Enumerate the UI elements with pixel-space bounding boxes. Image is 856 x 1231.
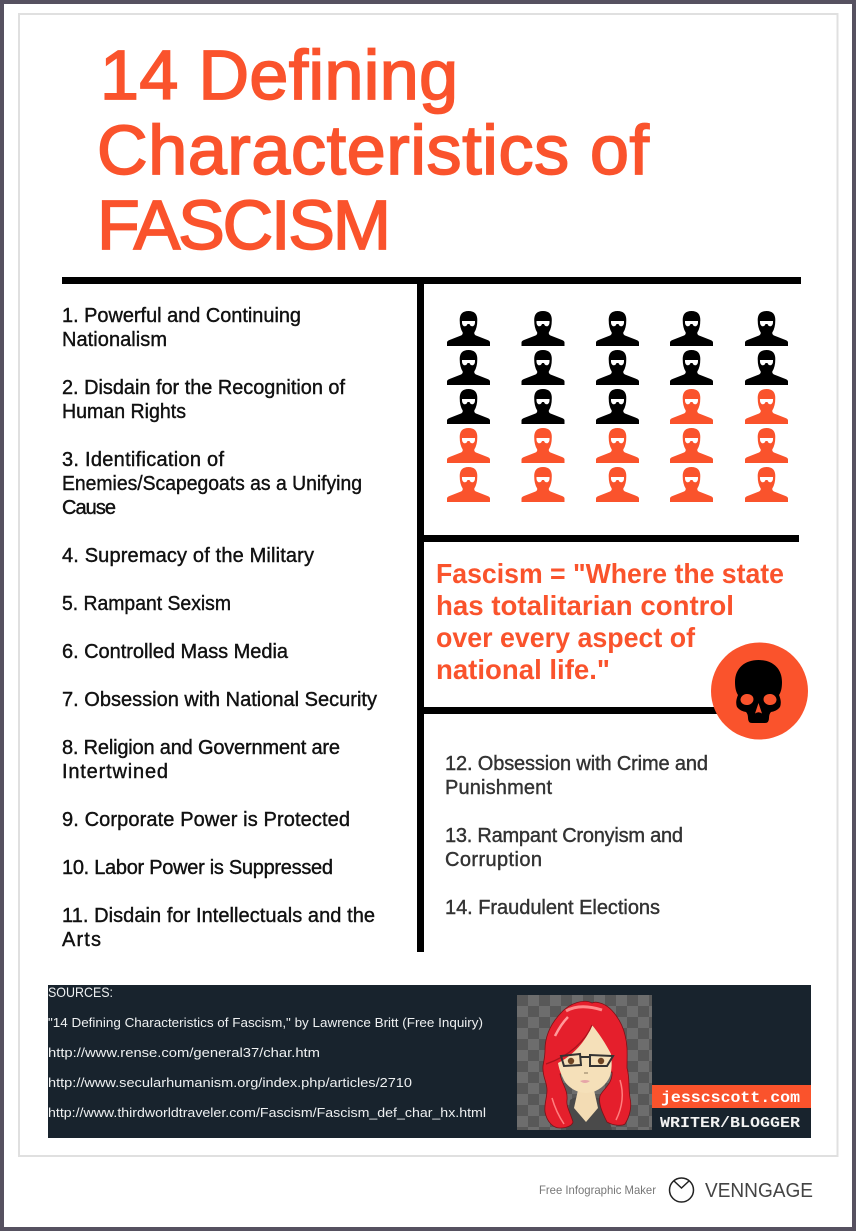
title: 14 Defining [100, 36, 458, 114]
fascism definition quote: national life." [436, 654, 610, 685]
fascism definition quote: has totalitarian control [436, 590, 734, 621]
list: characteristics 1 to 11: Human Rights [62, 401, 186, 423]
title: FASCISM [97, 186, 391, 264]
venngage footer logo [539, 1178, 813, 1202]
list: characteristics 12 to 14 [445, 753, 708, 919]
panel: sources and author [48, 984, 811, 1138]
fascism definition quote [436, 558, 784, 685]
icon: skull badge [711, 642, 808, 740]
list: characteristics 1 to 11: Arts [62, 929, 101, 951]
list: characteristics 1 to 11: 7. Obsession with National Security [62, 689, 377, 711]
list: characteristics 1 to 11: 9. Corporate Power is Protected [62, 809, 350, 831]
list: characteristics 1 to 11 [62, 305, 377, 951]
list: characteristics 1 to 11: 2. Disdain for the Recognition of [62, 377, 345, 399]
list: characteristics 12 to 14: Punishment [445, 777, 552, 799]
list: characteristics 1 to 11: 4. Supremacy of the Military [62, 545, 314, 567]
pictogram: 25 masked figures, 12 orange [447, 311, 788, 502]
list: characteristics 1 to 11: 1. Powerful and Continuing [62, 305, 301, 327]
sources text: "14 Defining Characteristics of Fascism," by Lawrence Britt (Free Inquiry) [48, 1015, 483, 1030]
list: characteristics 12 to 14: Corruption [445, 849, 542, 871]
list: characteristics 1 to 11: 6. Controlled Mass Media [62, 641, 289, 663]
sources text [48, 984, 486, 1120]
author site banner [652, 1085, 811, 1108]
sources text: http://www.secularhumanism.org/index.php/articles/2710 [48, 1075, 412, 1090]
list: characteristics 1 to 11: 5. Rampant Sexism [62, 593, 231, 615]
list: characteristics 1 to 11: 10. Labor Power is Suppressed [62, 857, 333, 879]
list: characteristics 12 to 14: 14. Fraudulent Elections [445, 897, 660, 919]
sources text: http://www.rense.com/general37/char.htm [48, 1045, 320, 1060]
author role: WRITER/BLOGGER [660, 1115, 800, 1132]
avatar: red-haired woman with glasses [517, 995, 652, 1130]
venngage footer logo: Free Infographic Maker [539, 1183, 656, 1197]
fascism definition quote: over every aspect of [436, 622, 696, 653]
list: characteristics 1 to 11: Intertwined [62, 761, 168, 783]
title [97, 36, 650, 264]
list: characteristics 1 to 11: 8. Religion and Government are [62, 737, 340, 759]
venngage footer logo: VENNGAGE [705, 1180, 813, 1202]
list: characteristics 12 to 14: 13. Rampant Cronyism and [445, 825, 683, 847]
fascism definition quote: Fascism = "Where the state [436, 558, 784, 589]
list: characteristics 1 to 11: 11. Disdain for Intellectuals and the [62, 905, 375, 927]
title: Characteristics of [97, 111, 650, 189]
list: characteristics 1 to 11: Enemies/Scapegoats as a Unifying [62, 473, 362, 495]
list: characteristics 1 to 11: Nationalism [62, 329, 167, 351]
list: characteristics 1 to 11: 3. Identification of [62, 449, 224, 471]
list: characteristics 1 to 11: Cause [62, 497, 116, 519]
sources text: SOURCES: [48, 984, 113, 1000]
list: characteristics 12 to 14: 12. Obsession with Crime and [445, 753, 708, 775]
sources text: http://www.thirdworldtraveler.com/Fascism/Fascism_def_char_hx.html [48, 1105, 486, 1120]
author site banner: jesscscott.com [661, 1089, 800, 1107]
